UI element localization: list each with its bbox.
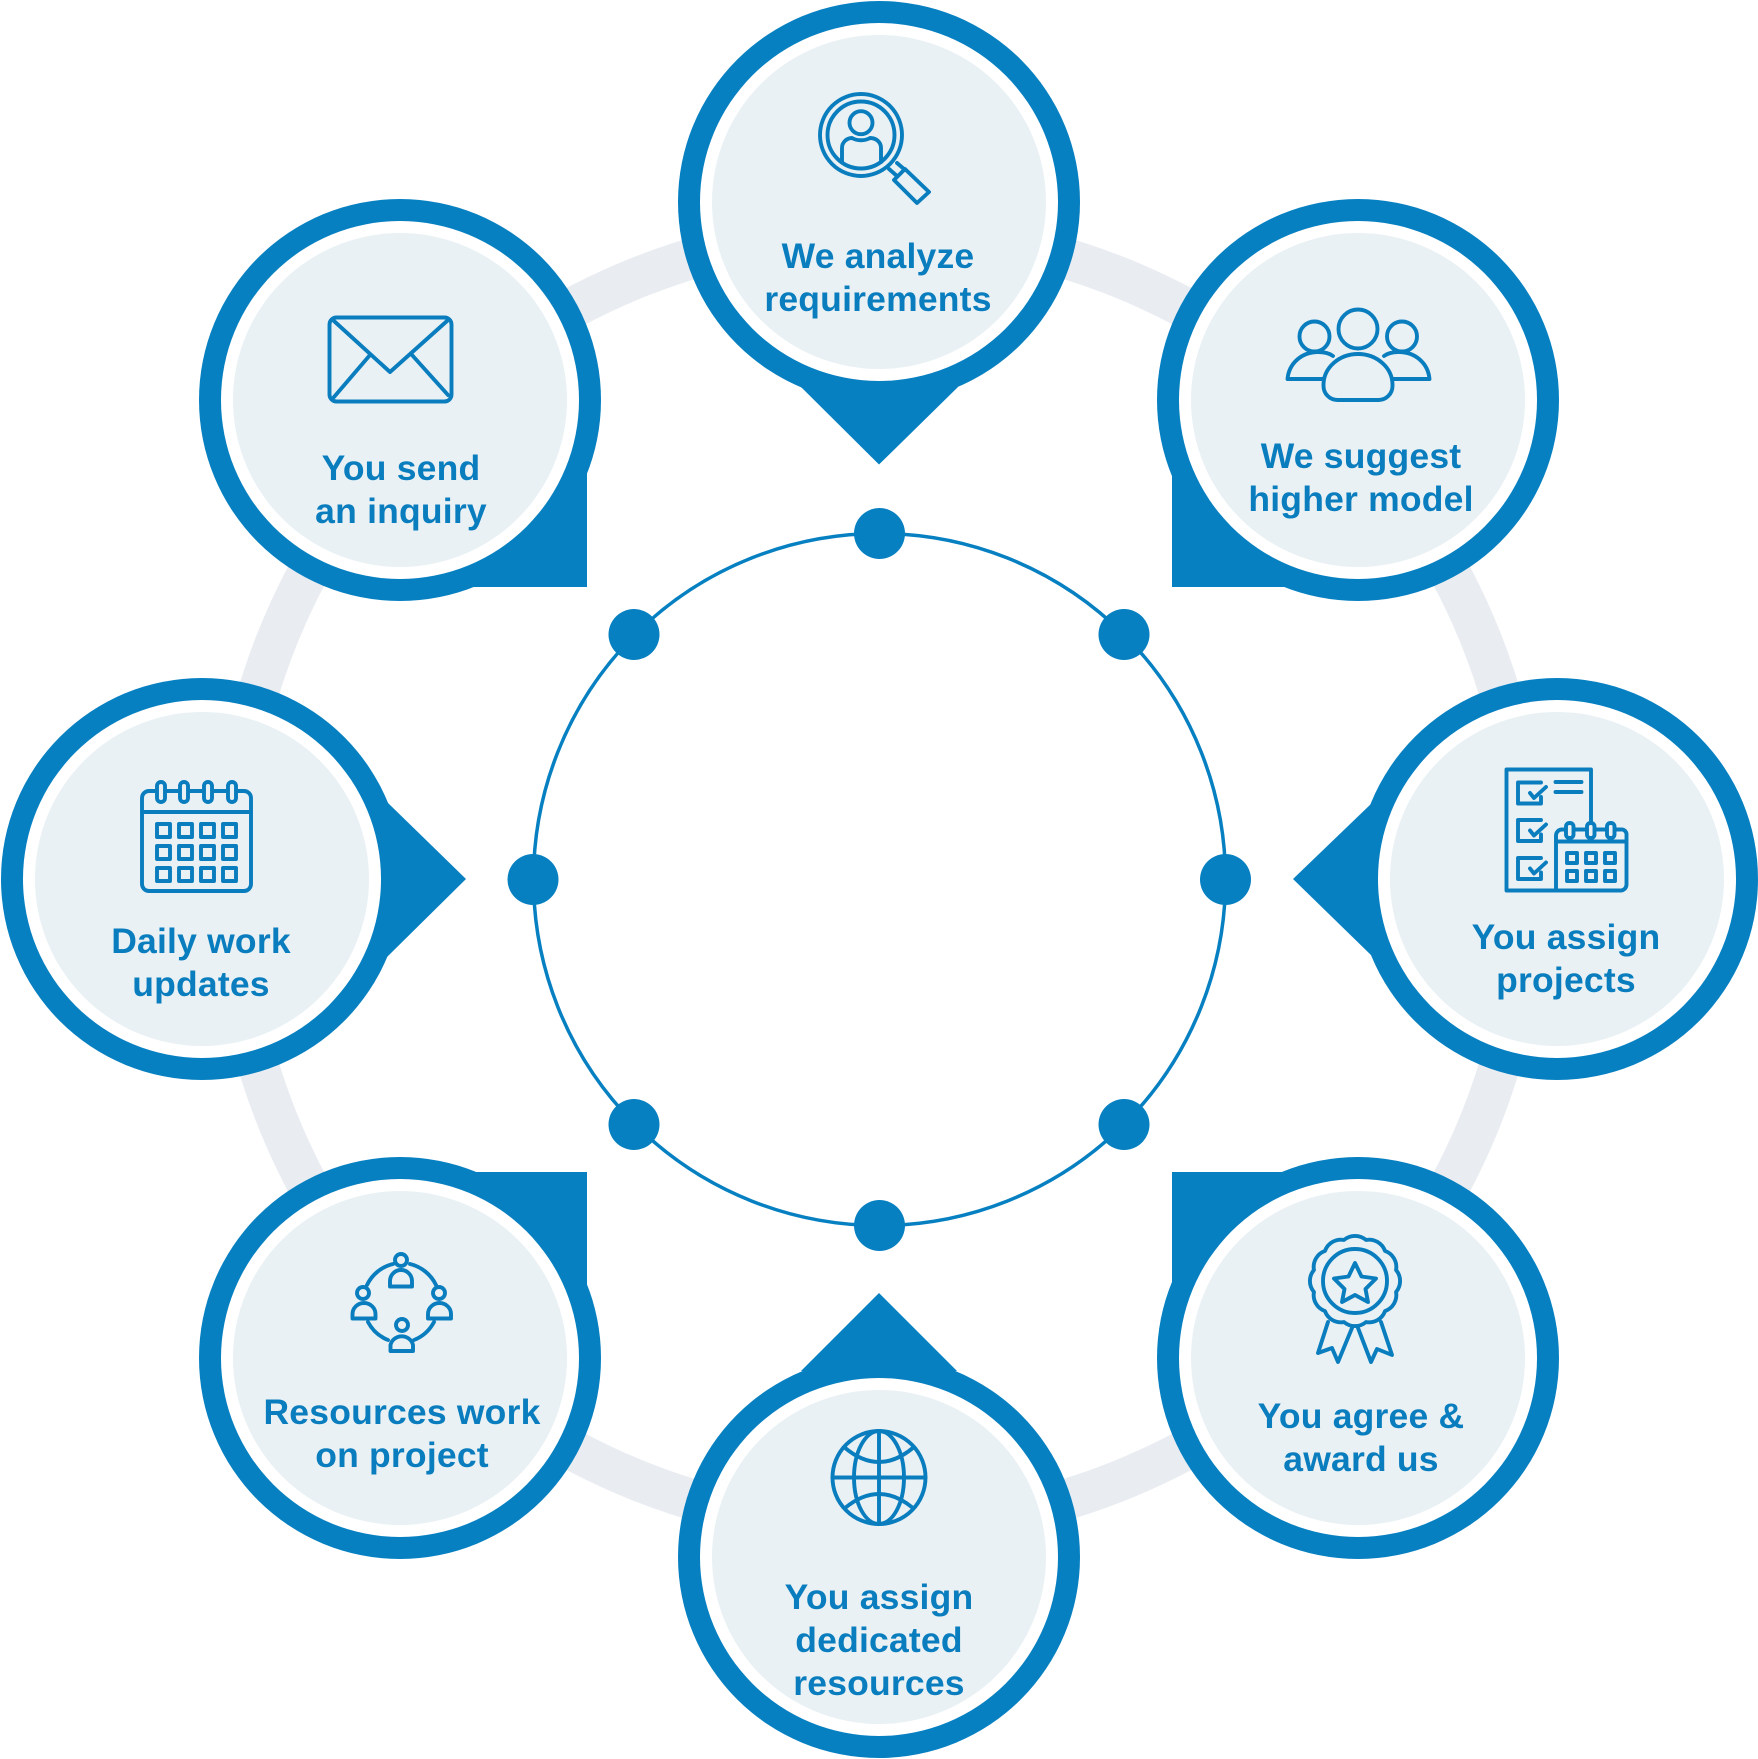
panel: we analyze requirements (678, 1, 1080, 464)
icon: award rosette (1310, 1236, 1400, 1362)
inner timeline ring with dots (508, 508, 1251, 1251)
label: you assign projects: You assign (1472, 917, 1660, 957)
panel: resources work on project (199, 1157, 601, 1559)
label: daily work updates (111, 921, 291, 1004)
label: you agree and award us: You agree & (1258, 1396, 1464, 1436)
label: you send an inquiry: You send (322, 448, 480, 488)
label: we analyze requirements: requirements (764, 279, 992, 319)
icon: checklist and calendar (1506, 770, 1627, 891)
label: you agree and award us (1258, 1396, 1464, 1479)
label: we suggest higher model: higher model (1248, 479, 1474, 519)
label: you send an inquiry: an inquiry (315, 491, 487, 531)
outer grey ring (231, 231, 1527, 1527)
label: we analyze requirements (764, 236, 992, 319)
label: you assign projects: projects (1496, 960, 1636, 1000)
panel: we suggest higher model (1157, 199, 1559, 601)
panel: daily work updates (1, 678, 466, 1080)
label: you assign dedicated resources: dedicated (795, 1620, 963, 1660)
label: we analyze requirements: We analyze (782, 236, 974, 276)
panel: you agree and award us (1157, 1157, 1559, 1559)
icon: team circle (352, 1254, 451, 1351)
label: you send an inquiry (315, 448, 487, 531)
icon: calendar (142, 782, 251, 891)
icon: magnifier with person (820, 94, 929, 203)
label: you assign dedicated resources: resources (793, 1663, 965, 1703)
label: daily work updates: updates (132, 964, 270, 1004)
label: we suggest higher model (1248, 436, 1474, 519)
panel: you assign dedicated resources (678, 1293, 1080, 1758)
label: you assign dedicated resources: You assign (785, 1577, 973, 1617)
icon: envelope (330, 318, 452, 402)
icon: group of people (1288, 310, 1430, 400)
label: you agree and award us: award us (1283, 1439, 1439, 1479)
label: resources work on project: on project (315, 1435, 489, 1475)
label: resources work on project (263, 1392, 541, 1475)
panel: you assign projects (1293, 678, 1758, 1080)
label: you assign projects (1472, 917, 1660, 1000)
label: you assign dedicated resources (785, 1577, 973, 1703)
panel: you send an inquiry (199, 199, 601, 601)
label: resources work on project: Resources work (263, 1392, 541, 1432)
icon: globe (832, 1431, 926, 1524)
label: we suggest higher model: We suggest (1261, 436, 1461, 476)
label: daily work updates: Daily work (111, 921, 291, 961)
